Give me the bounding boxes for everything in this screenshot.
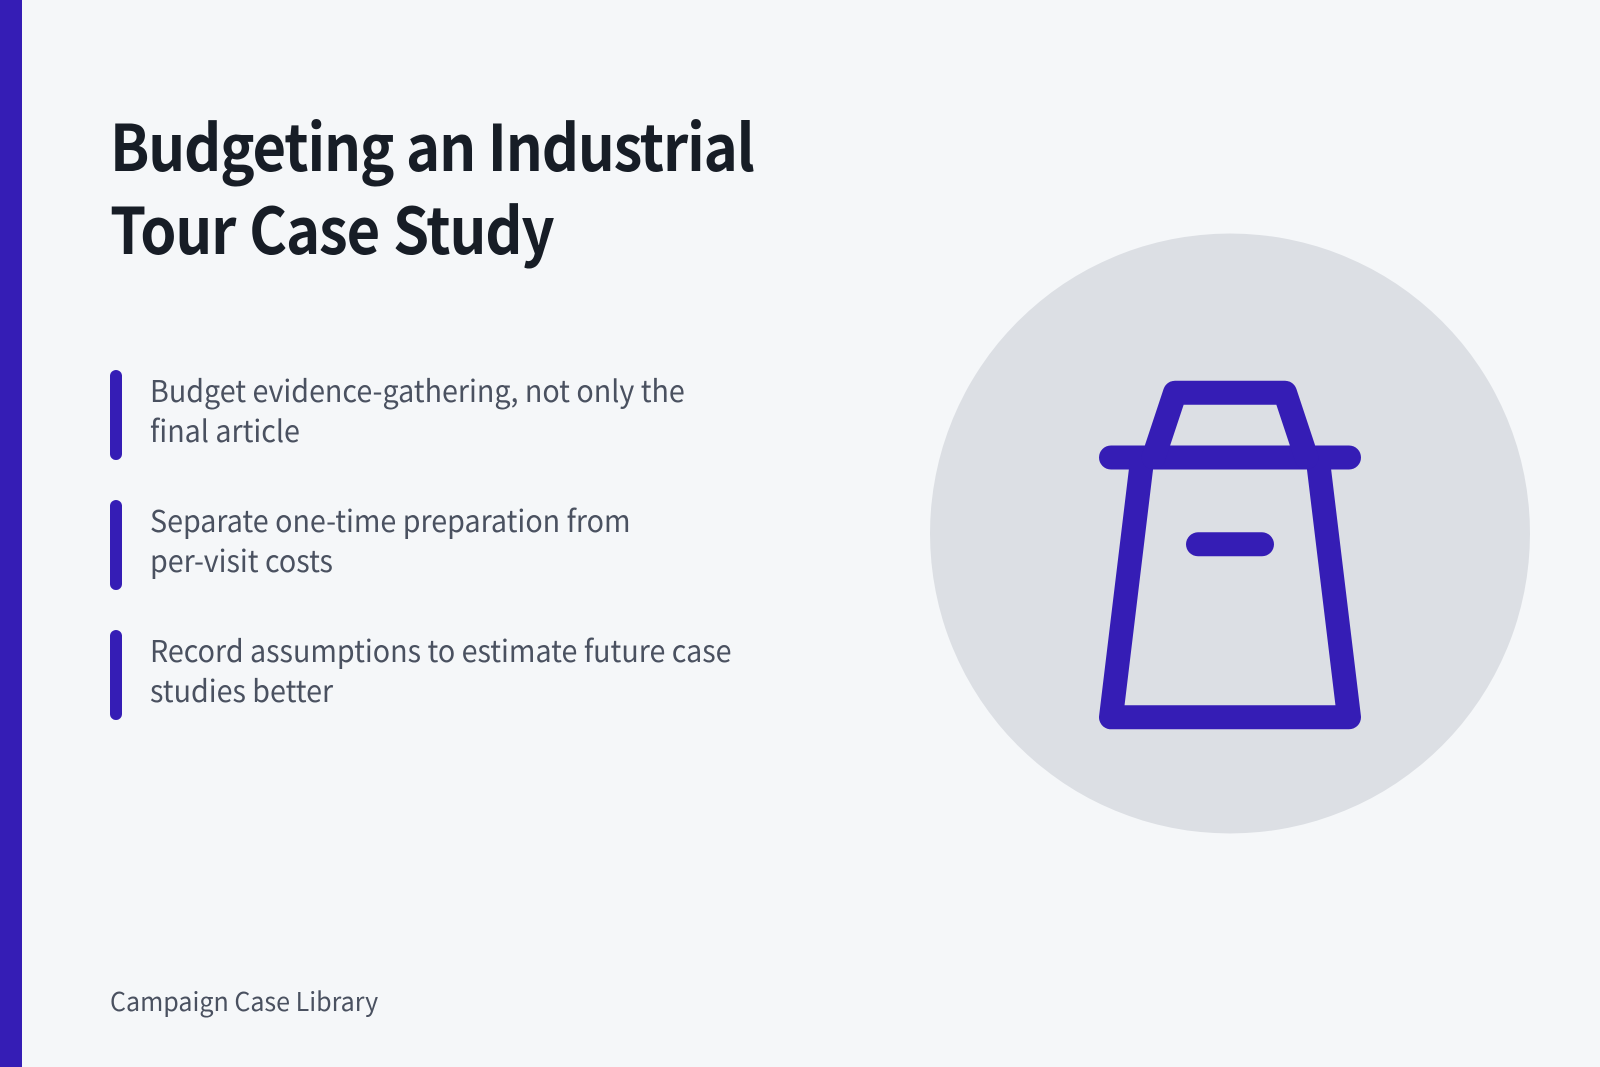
bullet marker 3 xyxy=(110,630,122,720)
bullet text 2: per-visit costs xyxy=(150,537,333,581)
icon: industrial building / bag xyxy=(1111,393,1349,717)
bullet list xyxy=(110,367,732,720)
background circle xyxy=(930,234,1530,834)
footer source label: Campaign Case Library xyxy=(110,982,378,1019)
bullet marker 2 xyxy=(110,500,122,590)
bullet text 3 xyxy=(150,627,732,711)
bullet text 1: final article xyxy=(150,407,300,451)
left accent bar xyxy=(0,0,22,1067)
title xyxy=(110,98,754,272)
bullet text 2: Separate one-time preparation from xyxy=(150,497,631,541)
bullet marker 1 xyxy=(110,370,122,460)
title: Budgeting an Industrial xyxy=(110,98,754,190)
title: Tour Case Study xyxy=(110,180,553,272)
bullet text 1: Budget evidence-gathering, not only the xyxy=(150,367,685,411)
bullet text 2 xyxy=(150,497,631,581)
bullet text 1 xyxy=(150,367,685,451)
bullet text 3: studies better xyxy=(150,667,333,711)
bullet text 3: Record assumptions to estimate future case xyxy=(150,627,732,671)
